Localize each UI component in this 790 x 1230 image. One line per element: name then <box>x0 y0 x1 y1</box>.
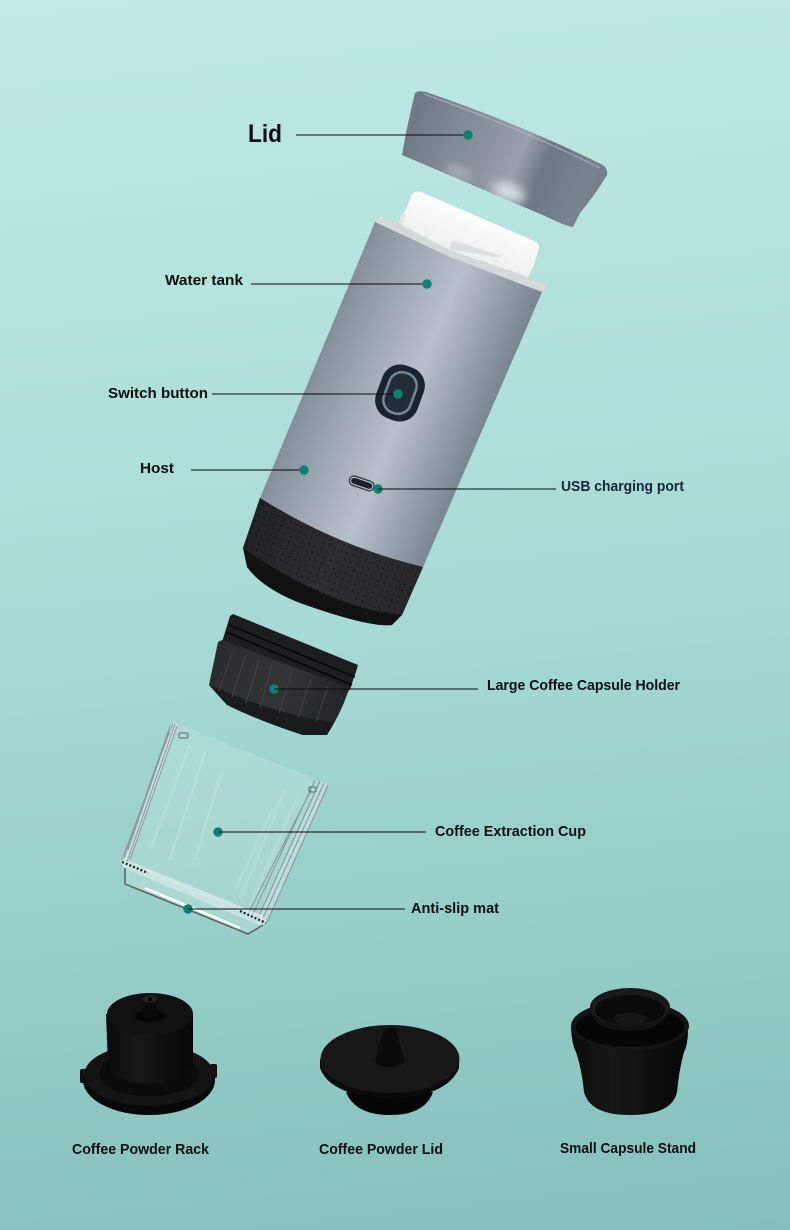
right ridges <box>258 781 328 922</box>
callout: USB charging port <box>373 478 684 495</box>
callout: Switch button <box>108 385 403 402</box>
left ridges <box>120 722 178 866</box>
transparent walls <box>120 722 328 922</box>
rack base plate <box>80 1044 217 1115</box>
callout: Water tank <box>165 272 432 289</box>
metal body <box>260 222 542 567</box>
callout: Coffee Extraction Cup: Coffee Extraction Cup <box>435 823 586 840</box>
accessory: small capsule stand <box>571 988 689 1115</box>
inner ribs <box>150 745 298 905</box>
callout: Lid: Lid <box>248 120 282 148</box>
callout: Host: Host <box>140 460 174 477</box>
tank flange <box>375 215 546 292</box>
knurled grip <box>209 640 350 735</box>
threaded neck <box>222 614 358 690</box>
callout: Switch button: Switch button <box>108 385 208 402</box>
cup base band <box>120 860 267 926</box>
callout: Water tank: Water tank <box>165 272 244 289</box>
callout: Anti-slip mat: Anti-slip mat <box>411 900 499 917</box>
callout: Large Coffee Capsule Holder: Large Coffee Capsule Holder <box>487 677 680 694</box>
callout: Large Coffee Capsule Holder <box>269 677 680 694</box>
callout: Host <box>140 460 309 477</box>
lid cone <box>375 1027 404 1067</box>
rack nozzle <box>135 996 165 1022</box>
accessory: coffee powder rack <box>80 993 217 1115</box>
cup base tray and anti-slip mat <box>122 862 266 934</box>
switch button <box>370 359 430 427</box>
callout: Coffee Extraction Cup <box>213 823 586 840</box>
label: Coffee Powder Lid: Coffee Powder Lid <box>319 1141 443 1158</box>
coffee extraction cup <box>120 722 328 934</box>
capsule holder product part <box>209 614 358 735</box>
USB-C port <box>347 474 376 493</box>
lid product part <box>402 91 607 227</box>
callout: Lid <box>248 120 473 148</box>
callout: Anti-slip mat <box>183 900 499 917</box>
stand rim <box>571 1001 689 1051</box>
lid disc <box>320 1025 460 1099</box>
water tank and host body <box>243 192 546 625</box>
rubber base <box>243 498 423 625</box>
stand inner cup <box>590 988 670 1031</box>
lid underside <box>346 1092 433 1115</box>
label: Small Capsule Stand: Small Capsule Stand <box>560 1140 696 1157</box>
stand body <box>571 1028 688 1115</box>
label: Coffee Powder Rack: Coffee Powder Rack <box>72 1141 210 1158</box>
accessory: coffee powder lid <box>320 1025 460 1115</box>
rack cylinder <box>106 993 193 1084</box>
white tank cap <box>396 192 539 282</box>
callout: USB charging port: USB charging port <box>561 478 684 495</box>
clip marks <box>179 733 316 792</box>
